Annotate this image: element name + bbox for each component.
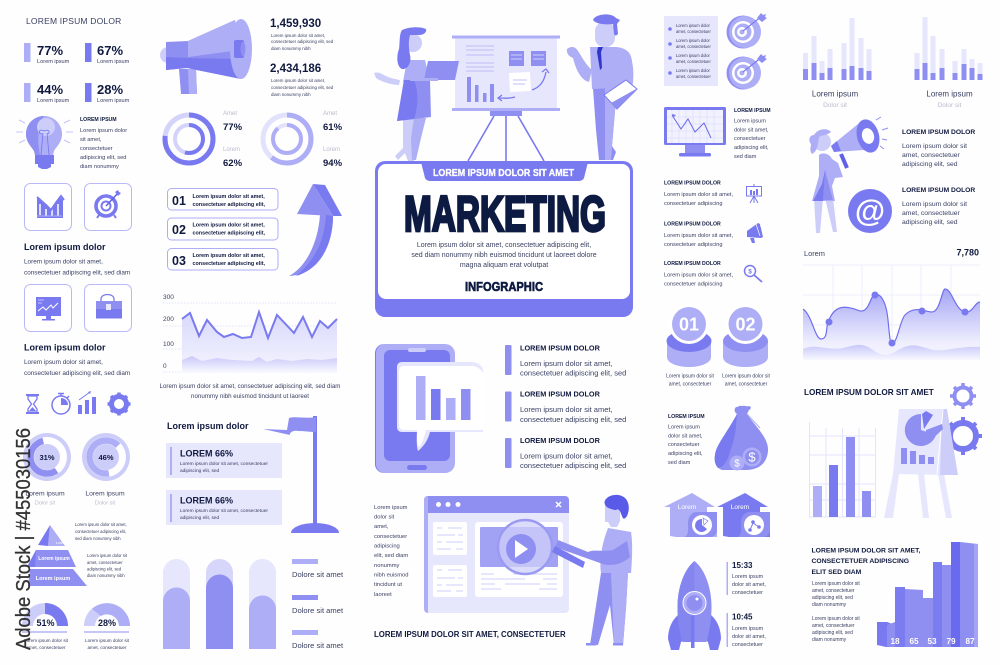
panel: bullet list: amet, consectetuer <box>676 44 711 49</box>
icon: rocket <box>668 561 721 650</box>
labels under donuts: Lorem ipsum <box>25 490 65 498</box>
card: lorem 66% first: adipiscing elit, sed <box>180 468 220 474</box>
badge 02: 02 <box>735 314 756 334</box>
badge captions: Lorem ipsum dolor sit <box>666 374 715 380</box>
text: stairs description: Lorem ipsum dolor sit <box>812 616 860 622</box>
chart: line chart <box>163 294 337 372</box>
list row: presentation: LOREM IPSUM DOLOR <box>664 180 721 186</box>
text: stairs description: amet, consectetuer <box>812 623 855 629</box>
chart: smooth area chart <box>803 248 980 360</box>
list item 2: LOREM IPSUM DOLOR <box>520 390 601 398</box>
text: pyramid notes <box>75 522 128 578</box>
text: browser side paragraph: laoreet <box>374 592 392 598</box>
text: monitor description <box>734 108 771 160</box>
icon box: target <box>84 184 132 230</box>
icon: house arrow with share: Lorem <box>731 504 749 511</box>
text: pyramid notes: sed diam nonummy nibh <box>75 536 121 541</box>
text: lorem ipsum dolor block 1: Lorem ipsum dolor <box>24 242 106 252</box>
icon: mini board <box>746 184 762 203</box>
stat 28% <box>85 82 130 104</box>
stat: 1,459,930: diam nonummy nibh <box>271 46 311 51</box>
icon: at sign: @ <box>855 193 885 228</box>
text: stairs description: adipiscing elit, sed <box>812 595 853 601</box>
badge 02 <box>723 304 768 367</box>
title description: Lorem ipsum dolor sit amet, consectetuer adipiscing elit, <box>417 242 591 249</box>
badge 01: 01 <box>679 314 699 334</box>
icon: light bulb <box>16 116 73 169</box>
text: money description: consectetuer <box>668 442 700 448</box>
text: money description: adipiscing elit, <box>668 451 703 457</box>
chart: ring pair 77 and 62 <box>165 115 213 163</box>
stat 67%: 67% <box>97 43 123 58</box>
labels: ring pair 2: Amet <box>323 111 337 117</box>
badge captions <box>666 374 771 388</box>
caption: line chart: Lorem ipsum dolor sit amet, consectetuer adipiscing elit, sed diam <box>160 383 340 390</box>
text: lorem ipsum dolor block 2 <box>24 342 130 377</box>
step 03 <box>168 248 278 270</box>
chart: pyramid: Lorem ipsum <box>36 576 70 582</box>
text: megaphone notes: amet, consectetuer <box>902 210 961 217</box>
icon: flag <box>263 416 339 533</box>
badge captions: Lorem ipsum dolor sit <box>722 374 771 380</box>
chart: half donut 28%: 28% <box>98 618 116 628</box>
text: monitor description: sed diam <box>734 154 757 160</box>
list item 3 <box>505 436 626 470</box>
labels under donuts <box>25 490 125 506</box>
badge captions: amet, consectetuer <box>669 382 712 388</box>
text: pyramid notes: diam nonummy nibh <box>87 573 125 578</box>
text: browser side paragraph: elit, sed diam <box>374 553 408 559</box>
icon: gears <box>944 383 982 455</box>
chart: 3D stairs: 79 <box>946 637 956 646</box>
text: stairs description <box>812 548 920 643</box>
text: megaphone notes: Lorem ipsum dolor sit <box>902 143 967 150</box>
text: lorem ipsum dolor block 1: Lorem ipsum dolor sit amet, <box>24 258 103 266</box>
text: pyramid notes: amet, consectetuer <box>87 560 123 565</box>
stat: 2,434,186: diam nonummy nibh <box>271 92 311 97</box>
step 02: Lorem ipsum dolor sit amet, <box>192 222 265 228</box>
labels: ring pair 1: Amet <box>223 111 237 117</box>
step 02: 02 <box>172 223 186 237</box>
chart: 3D stairs: 65 <box>909 637 919 646</box>
text: browser side paragraph: dolor sit <box>374 514 395 520</box>
stat 44%: Lorem ipsum <box>37 98 70 104</box>
text: money description <box>668 414 705 466</box>
text: browser side paragraph: nonummy <box>374 563 400 569</box>
text: money description: sed diam <box>668 460 691 466</box>
panel: bullet list: Lorem ipsum dolor <box>676 68 711 73</box>
labels: ring pair 2: 94% <box>323 158 343 169</box>
banner: LOREM IPSUM DOLOR SIT AMET <box>433 168 574 179</box>
panel: bullet list <box>664 16 718 86</box>
title card <box>375 161 633 317</box>
text: bulb description <box>80 117 127 170</box>
card: lorem 66% second: LOREM 66% <box>180 496 233 506</box>
text: browser side paragraph: consectetuer <box>374 534 407 540</box>
chart: half donut 28%: Lorem ipsum dolor sit <box>85 638 130 643</box>
panel: bullet list: Lorem ipsum dolor <box>676 23 711 28</box>
stat 67%: Lorem ipsum <box>97 59 130 65</box>
card: lorem 66% second: adipiscing elit, sed <box>180 515 220 521</box>
text: browser side paragraph: nibh euismod <box>374 572 408 578</box>
text: monitor description: Lorem ipsum <box>734 118 766 124</box>
time 15:33: dolor sit amet, <box>732 582 766 588</box>
legend: rounded bars: Dolore sit amet <box>292 641 344 650</box>
subtitle: infographic: INFOGRAPHIC <box>465 279 544 294</box>
time 15:33: consectetuer <box>732 590 763 596</box>
icon: house arrow with pie: Lorem <box>678 504 696 511</box>
chart: bar chart right: Lorem ipsum <box>926 90 973 98</box>
chart: line chart: 300 <box>163 294 174 301</box>
labels: ring pair 1: 62% <box>223 158 243 169</box>
labels under donuts: Dolor sit <box>95 500 116 506</box>
text: pyramid notes: consectetuer adipiscing elit, <box>75 529 126 534</box>
icon: money bag <box>715 406 768 470</box>
chart: half donut 28%: amet, consectetuer <box>87 645 127 650</box>
step 01: 01 <box>172 194 186 208</box>
text: megaphone notes: adipiscing elit, sed <box>902 161 958 168</box>
text: bulb description: sit amet, <box>80 137 102 143</box>
card: lorem 66% second: Lorem ipsum dolor sit amet, consectetuer <box>180 508 268 514</box>
legend: rounded bars: Dolore sit amet <box>292 570 344 579</box>
text: megaphone notes: Lorem ipsum dolor sit <box>902 201 967 208</box>
list item 2: consectetuer adipiscing elit, sed <box>520 415 626 424</box>
chart: donut 46% <box>82 433 130 481</box>
text: megaphone notes: amet, consectetuer <box>902 152 961 159</box>
icon: house arrow with pie <box>664 493 717 537</box>
stat: 2,434,186: Lorem ipsum dolor sit amet, <box>271 78 325 83</box>
stat: 1,459,930: Lorem ipsum dolor sit amet, <box>271 33 325 38</box>
illustration: browser window <box>424 496 569 613</box>
text: stairs description: LOREM IPSUM DOLOR SIT AMET, <box>812 548 920 554</box>
list item 1: consectetuer adipiscing elit, sed <box>520 368 626 378</box>
list row: search: Lorem ipsum dolor sit amet, <box>664 272 733 278</box>
step 03: Lorem ipsum dolor sit amet, <box>192 253 265 259</box>
text: pyramid notes: adipiscing elit, sed <box>87 566 122 572</box>
labels under donuts: Dolor sit <box>35 500 56 506</box>
card: lorem 66% first: Lorem ipsum dolor sit amet, consectetuer <box>180 461 268 467</box>
step 01: consectetuer adipiscing elit, <box>192 202 265 208</box>
chart: grid bar chart <box>809 422 876 517</box>
heading: gears section: LOREM IPSUM DOLOR SIT AMET <box>804 388 934 397</box>
step 01: Lorem ipsum dolor sit amet, <box>192 194 265 200</box>
text: bulb description: Lorem ipsum dolor <box>80 128 127 134</box>
text: lorem ipsum dolor block 2: Lorem ipsum dolor <box>24 342 106 352</box>
card: lorem 66% first: LOREM 66% <box>180 448 233 458</box>
chart: ring pair 61 and 94 <box>263 115 311 163</box>
chart: half donut 51%: 51% <box>36 618 55 628</box>
text: bulb description: LOREM IPSUM <box>80 117 117 123</box>
stat 28%: Lorem ipsum <box>97 98 130 104</box>
text: browser side paragraph <box>374 505 408 598</box>
stat 44%: 44% <box>37 82 63 97</box>
text: money description: LOREM IPSUM <box>668 414 705 420</box>
text: lorem ipsum dolor block 1 <box>24 242 130 276</box>
stat 28%: 28% <box>97 82 123 97</box>
list row: megaphone: consectetuer adipiscing <box>664 242 722 248</box>
chart: half donut 51%: amet, consectetuer <box>26 645 66 650</box>
list item 1 <box>505 344 626 378</box>
text: pyramid notes: Lorem ipsum dolor sit amet, <box>75 522 127 527</box>
chart: 3D stairs <box>877 542 978 647</box>
panel: percentage stats <box>24 16 130 104</box>
panel: bullet list: Lorem ipsum dolor <box>676 38 711 43</box>
step 03: consectetuer adipiscing elit, <box>192 261 265 267</box>
text: monitor description: consectetuer <box>734 136 766 142</box>
list row: search <box>664 261 762 288</box>
icon: target 2 <box>726 54 767 90</box>
title: marketing: MARKETING <box>404 186 606 242</box>
illustration: presentation board <box>452 36 560 161</box>
stat 67% <box>85 43 130 65</box>
list row: search: consectetuer adipiscing <box>664 282 722 288</box>
text: browser side paragraph: Lorem ipsum <box>374 505 408 511</box>
text: megaphone notes: LOREM IPSUM DOLOR <box>902 187 975 194</box>
title description: sed diam nonummy nibh euismod tincidunt ut laoreet dolore <box>411 252 597 259</box>
text: browser side paragraph: amet, <box>374 524 389 530</box>
title description <box>411 242 597 269</box>
labels: ring pair 2 <box>323 111 343 169</box>
chart: bar chart right <box>914 17 982 109</box>
time 15:33 <box>726 561 766 596</box>
heading: lorem ipsum dolor: LOREM IPSUM DOLOR <box>26 16 122 26</box>
icon box: monitor <box>24 284 72 332</box>
list row: megaphone: Lorem ipsum dolor sit amet, <box>664 233 733 239</box>
panel: bullet list: amet, consectetuer <box>676 59 711 64</box>
chart: half donut 51% <box>22 603 69 650</box>
list row: megaphone: LOREM IPSUM DOLOR <box>664 222 721 228</box>
step 02 <box>168 218 278 240</box>
text: lorem ipsum dolor block 2: consectetuer adipiscing elit, sed diam <box>24 370 130 377</box>
chart: half donut 51%: Lorem ipsum dolor sit <box>24 638 69 643</box>
panel: bullet list: amet, consectetuer <box>676 29 711 34</box>
chart: smooth area chart: 7,780 <box>956 248 979 258</box>
labels: ring pair 1 <box>223 111 243 169</box>
stat: 2,434,186 <box>270 63 334 97</box>
chart: pyramid: Lorem <box>56 541 66 545</box>
illustration: easel with pie <box>884 409 958 518</box>
legend: rounded bars: Dolore sit amet <box>292 606 344 615</box>
stat: 2,434,186: 2,434,186 <box>270 63 321 75</box>
text: stairs description: adipiscing elit, sed <box>812 630 853 636</box>
icon: money bag: $ <box>748 450 756 464</box>
text: megaphone notes: LOREM IPSUM DOLOR <box>902 129 975 136</box>
stat 77%: Lorem ipsum <box>37 59 70 65</box>
illustration: phone with chat chart <box>375 344 483 473</box>
caption: line chart <box>160 383 340 400</box>
illustration: man with clipboard <box>567 14 637 160</box>
chart: 3D stairs: 18 <box>890 637 900 646</box>
chart: line chart: 100 <box>163 341 174 348</box>
icon row: hourglass stopwatch growth gear <box>26 391 130 416</box>
text: lorem ipsum dolor block 2: Lorem ipsum dolor sit amet, <box>24 359 103 366</box>
text: bulb description: adipiscing elit, sed <box>80 155 126 161</box>
text: bulb description: consectetuer <box>80 146 113 152</box>
chart: bar chart right: Dolor sit <box>938 102 962 109</box>
icon: house arrow with share <box>717 493 770 537</box>
labels under donuts: Lorem ipsum <box>85 490 125 498</box>
text: megaphone notes: adipiscing elit, sed <box>902 219 958 226</box>
icon box: chart <box>24 184 72 230</box>
chart: pyramid <box>27 525 87 586</box>
text: money description: dolor sit amet, <box>668 434 703 440</box>
time 10:45: dolor sit amet, <box>732 634 766 640</box>
stock id watermark: Adobe Stock | #455030156 <box>12 428 35 650</box>
panel: bullet list: amet, consectetuer <box>676 74 711 79</box>
card: lorem 66% second <box>166 490 282 525</box>
illustration: woman with laptop <box>374 27 459 161</box>
chart: half donut 28% <box>84 603 130 650</box>
list row: presentation <box>664 180 762 207</box>
caption: browser section: LOREM IPSUM DOLOR SIT AMET, CONSECTETUER <box>374 630 566 639</box>
time 10:45: 10:45 <box>732 612 753 622</box>
chart: bar chart left: Dolor sit <box>823 102 847 109</box>
list item 3: Lorem ipsum dolor sit amet, <box>520 452 613 460</box>
text: stairs description: diam nonummy <box>812 602 847 608</box>
badge 01 <box>666 304 712 367</box>
banner <box>421 162 588 181</box>
list row: megaphone <box>664 222 763 248</box>
chart: smooth area chart: Lorem <box>804 249 825 258</box>
chart: line chart: 200 <box>163 316 174 323</box>
text: stairs description: CONSECTETUER ADIPISCING <box>812 558 909 565</box>
stat: 1,459,930 <box>270 18 334 51</box>
step 01 <box>168 188 278 210</box>
text: megaphone notes <box>902 129 975 226</box>
list row: presentation: Lorem ipsum dolor sit amet, <box>664 192 733 198</box>
text: browser side paragraph: adipiscing <box>374 544 400 550</box>
chart: line chart: 0 <box>163 363 167 370</box>
text: stairs description: Lorem ipsum dolor sit <box>812 581 860 587</box>
text: browser side paragraph: tincidunt ut <box>374 582 402 588</box>
legend: rounded bars <box>292 559 344 650</box>
text: stairs description: diam nonummy <box>812 637 847 643</box>
list item 3: consectetuer adipiscing elit, sed <box>520 461 626 470</box>
icon: megaphone <box>160 19 252 94</box>
illustration: man with magnifier <box>552 495 632 646</box>
text: monitor description: dolor sit amet, <box>734 128 769 134</box>
time 15:33: Lorem ipsum <box>732 574 764 580</box>
panel: bullet list: Lorem ipsum dolor <box>676 53 711 58</box>
labels: ring pair 1: Lorem <box>223 147 240 153</box>
stat: 1,459,930: consectetuer adipiscing elit, sed <box>271 39 334 44</box>
text: monitor description: adipiscing elit, <box>734 145 769 151</box>
chart: donut 31%: 31% <box>39 453 55 462</box>
time 10:45: consectetuer <box>732 642 763 648</box>
title description: magna aliquam erat volutpat <box>460 262 548 269</box>
time 15:33: 15:33 <box>732 561 753 570</box>
chart: 3D stairs: 87 <box>965 637 975 646</box>
icon: money bag: $ <box>734 458 740 470</box>
icon: target 1 <box>726 13 767 48</box>
text: monitor description: LOREM IPSUM <box>734 108 771 114</box>
list item 1: Lorem ipsum dolor sit amet, <box>520 359 613 368</box>
chart: rounded bars <box>163 559 276 649</box>
text: pyramid notes: Lorem ipsum dolor sit <box>87 553 128 558</box>
list row: search: LOREM IPSUM DOLOR <box>664 261 721 267</box>
icon: mini magnifier: $ <box>748 268 752 276</box>
chart: bar chart left: Lorem ipsum <box>812 90 858 98</box>
labels: ring pair 2: 61% <box>323 122 343 133</box>
badge captions: amet, consectetuer <box>725 382 768 388</box>
list item 2 <box>505 390 626 424</box>
chart: donut 31% <box>23 433 71 481</box>
step 02: consectetuer adipiscing elit, <box>192 230 265 236</box>
stat 77% <box>24 43 70 65</box>
text: lorem ipsum dolor block 1: consectetuer adipiscing elit, sed diam <box>24 270 130 276</box>
icon: mini megaphone <box>747 223 763 243</box>
list item 1: LOREM IPSUM DOLOR <box>520 344 601 352</box>
illustration: woman with megaphone <box>809 117 888 233</box>
time 10:45 <box>726 612 766 648</box>
card: lorem 66% first <box>166 443 282 478</box>
icon box: briefcase <box>84 284 132 332</box>
stat 77%: 77% <box>37 43 63 58</box>
list item 2: Lorem ipsum dolor sit amet, <box>520 405 613 414</box>
labels: ring pair 2: Lorem <box>323 147 340 153</box>
chart: pyramid: Lorem ipsum <box>38 556 70 562</box>
text: money description: Lorem ipsum <box>668 424 700 430</box>
time 10:45: Lorem ipsum <box>732 626 764 632</box>
text: stairs description: amet, consectetuer <box>812 588 855 594</box>
list row: presentation: consectetuer adipiscing <box>664 201 722 207</box>
chart: 3D stairs: 53 <box>927 637 937 646</box>
stat: 1,459,930: 1,459,930 <box>270 18 321 30</box>
caption: line chart: nonummy nibh euismod tincidunt ut laoreet <box>191 393 309 400</box>
list item 3: LOREM IPSUM DOLOR <box>520 436 601 445</box>
stat: 2,434,186: consectetuer adipiscing elit, sed <box>271 85 334 90</box>
text: stairs description: ELIT SED DIAM <box>812 569 862 576</box>
arrow: upward curved <box>289 184 342 276</box>
labels: ring pair 1: 77% <box>223 122 243 133</box>
chart: bar chart left <box>803 18 872 109</box>
chart: donut 46%: 46% <box>98 453 114 462</box>
heading: flag section: Lorem ipsum dolor <box>167 421 249 431</box>
stat 44% <box>24 82 70 104</box>
text: bulb description: diam nonummy <box>80 164 119 170</box>
step 03: 03 <box>172 254 186 268</box>
icon: at sign <box>848 189 892 233</box>
icon: monitor with falling chart <box>664 107 726 156</box>
